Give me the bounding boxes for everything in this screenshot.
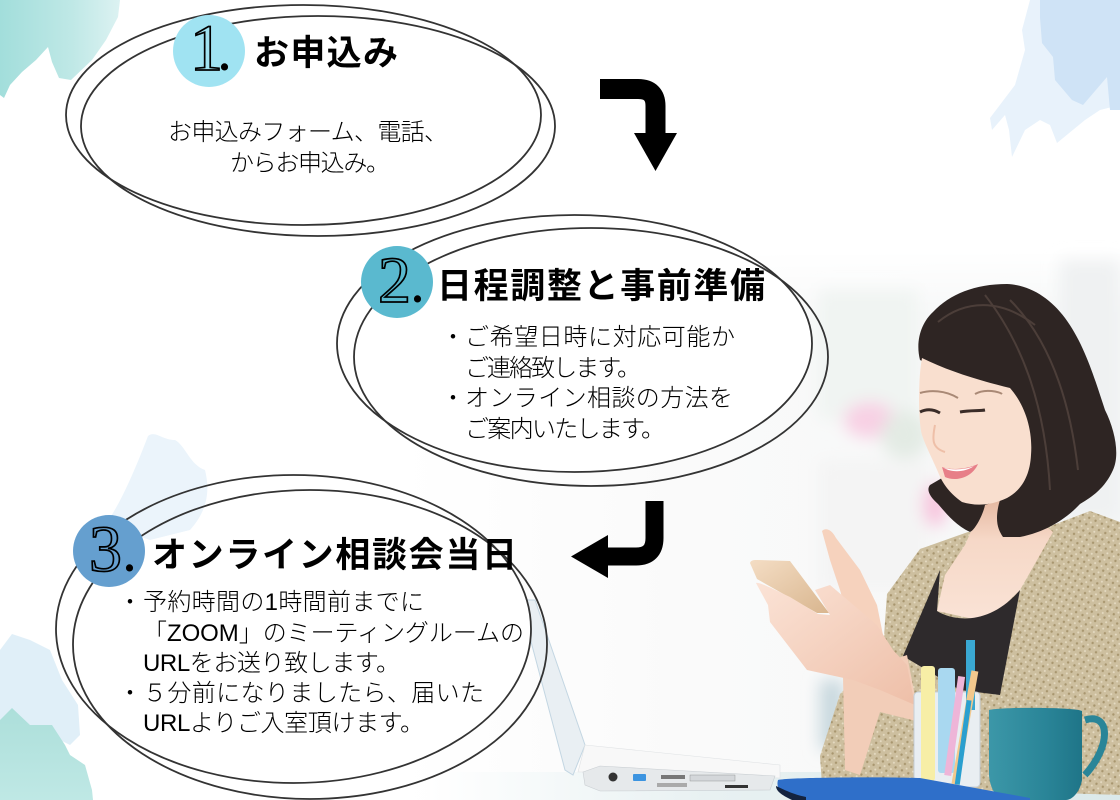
watercolor: top left teal	[0, 0, 120, 98]
step 1 number badge: .	[219, 31, 230, 80]
step 2 double ellipse	[337, 215, 828, 486]
neck and chest	[937, 495, 1053, 622]
step 1 heading: お申込み	[254, 34, 398, 73]
hair highlights	[938, 295, 1078, 490]
step 3 text: 「ZOOM」のミーティングルームの	[143, 620, 524, 647]
step 3 number badge	[73, 513, 145, 587]
step 1 number badge	[173, 12, 245, 87]
watercolor: mid left blue	[105, 434, 207, 540]
step 2 text: ご案内いたします。	[465, 416, 665, 443]
step 1 text: からお申込み。	[230, 150, 390, 177]
step 1 number badge: 1	[190, 12, 223, 85]
step 2 text: ・	[441, 324, 465, 351]
face	[919, 358, 1031, 505]
woman	[750, 284, 1120, 795]
mouth	[942, 464, 978, 479]
step 3 text: URLをお送り致します。	[143, 650, 400, 677]
photo background: bright window	[806, 260, 1120, 762]
inner forearm	[843, 655, 920, 775]
arrow 1: right then down	[600, 89, 677, 171]
phone	[750, 560, 829, 613]
step 3 text: ・	[118, 589, 142, 616]
laptop	[520, 600, 780, 791]
photo: woman using smartphone at desk	[527, 260, 1120, 800]
hair back	[918, 284, 1116, 537]
nose shade	[933, 425, 945, 452]
step 1 text: お申込みフォーム、電話、	[168, 119, 448, 146]
step 2 heading: 日程調整と事前準備	[437, 267, 765, 306]
step 3 panel	[56, 475, 547, 799]
pointing hand	[822, 529, 884, 640]
holding hand	[756, 583, 915, 705]
watercolor: top right blue	[990, 0, 1120, 157]
step 2 text: ご連絡致します。	[465, 355, 641, 382]
step 3 text: URLよりご入室頂けます。	[143, 710, 424, 737]
white ellipse fills over photo	[56, 215, 812, 783]
step 2 number badge: .	[412, 263, 423, 312]
step 3 text: ・	[118, 680, 142, 707]
step 3 double ellipse	[56, 475, 547, 799]
table top	[430, 772, 1120, 800]
mug	[989, 708, 1105, 800]
step 2 text: ・	[441, 385, 465, 412]
step 1 text	[168, 119, 448, 177]
step 2 panel	[337, 215, 828, 486]
watercolor: lower left teal	[0, 708, 93, 800]
step 2 text: オンライン相談の方法を	[465, 385, 733, 412]
blue folder	[776, 777, 1030, 800]
step 3 number badge: .	[124, 532, 135, 581]
step 2 number badge	[361, 244, 433, 318]
step 2 text: ご希望日時に対応可能か	[465, 324, 735, 351]
watercolor: lower left blue	[0, 634, 80, 745]
eyes and brows	[920, 391, 1002, 413]
step 1 double ellipse	[66, 5, 555, 236]
arrow 2: down then left	[571, 501, 654, 578]
step 3 text	[118, 589, 524, 737]
step 2 text	[441, 324, 735, 443]
step 1 panel	[66, 5, 555, 236]
black top	[903, 570, 1020, 695]
cardigan	[820, 511, 1120, 795]
pen cup	[914, 640, 980, 787]
step 3 text: ５分前になりましたら、届いた	[143, 680, 484, 707]
step 3 text: 予約時間の1時間前までに	[143, 589, 424, 616]
step 2 number badge: 2	[378, 244, 411, 317]
step 3 number badge: 3	[89, 513, 122, 586]
step 3 heading: オンライン相談会当日	[152, 536, 517, 575]
